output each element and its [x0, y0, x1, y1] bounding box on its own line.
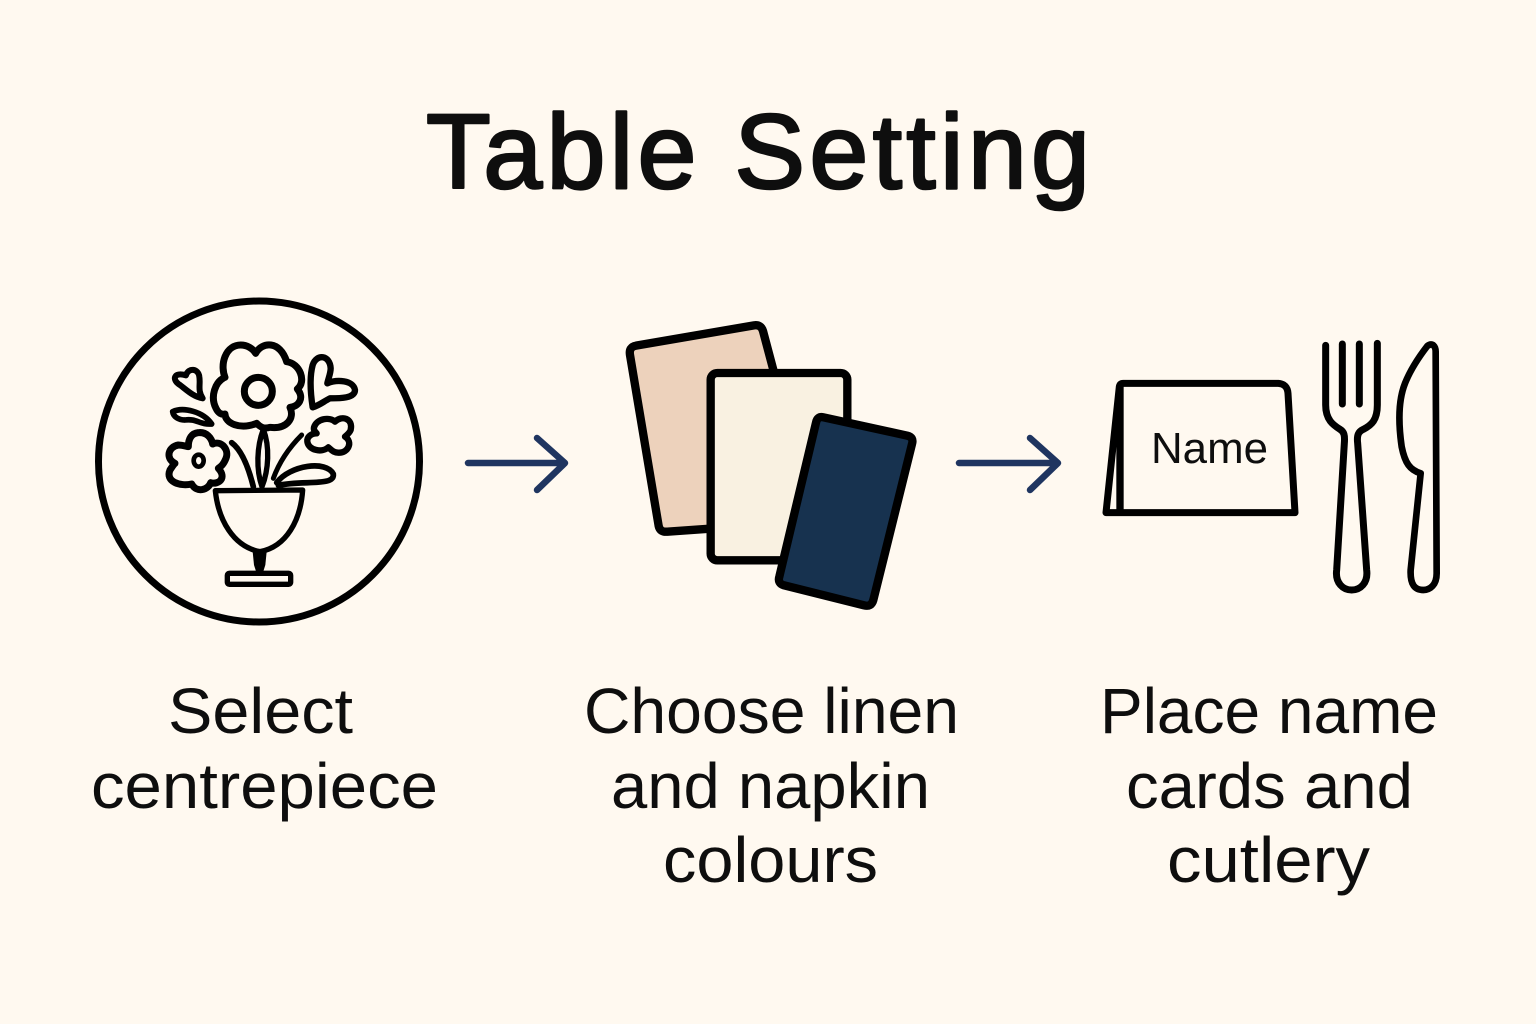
icon: linen and napkin swatches: [630, 325, 912, 606]
swatch: cream linen: [711, 373, 847, 560]
icon: centrepiece in circle: [98, 301, 420, 622]
icon: name card: [1106, 383, 1295, 513]
label: choose linen and napkin colours: colours: [663, 824, 878, 896]
icon: knife: [1399, 344, 1437, 590]
swatch: navy napkin: [779, 417, 912, 606]
title: Table Setting: [426, 93, 1090, 211]
arrow: step two to three: [959, 438, 1058, 490]
label: choose linen and napkin colours: Choose linen: [584, 675, 959, 747]
label: select centrepiece: [91, 675, 438, 822]
label: select centrepiece: centrepiece: [91, 750, 438, 822]
label: place name cards and cutlery: [1100, 675, 1438, 896]
icon ring: [98, 301, 420, 622]
label: choose linen and napkin colours: [584, 675, 959, 896]
icon: flower vase: [169, 345, 355, 584]
label: place name cards and cutlery: cards and: [1126, 750, 1413, 822]
arrow: step one to two: [468, 438, 565, 490]
label: place name cards and cutlery: Place name: [1100, 675, 1438, 747]
name card text: Name: [1151, 424, 1268, 473]
label: choose linen and napkin colours: and napkin: [611, 750, 930, 822]
label: place name cards and cutlery: cutlery: [1167, 824, 1370, 896]
swatch: peach linen: [630, 325, 787, 532]
label: select centrepiece: Select: [168, 675, 353, 747]
icon: fork: [1326, 343, 1377, 590]
